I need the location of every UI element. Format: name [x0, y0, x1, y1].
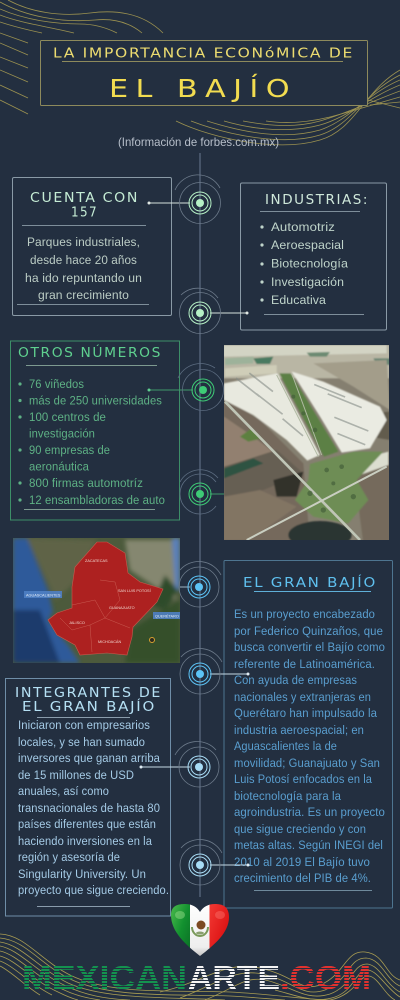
text: integrantes description: inversores que ganan arriba [18, 751, 160, 765]
text: parques industriales: Parques industriales, [27, 235, 140, 249]
image: map of El Bajio region: SAN LUIS POTOSÍ [118, 589, 152, 593]
panel: integrantes: EL GRAN BAJÍO [22, 699, 156, 715]
list: otros numeros: aeronáutica [29, 460, 89, 474]
footer brand text [22, 959, 371, 996]
image: map of El Bajio region: JALISCO [69, 621, 85, 625]
image: map of El Bajio region [13, 538, 180, 663]
timeline node 8 with connector [180, 839, 250, 885]
timeline line [199, 153, 201, 897]
list: otros numeros: más de 250 universidades [29, 394, 162, 408]
text: el gran bajio description [234, 607, 385, 885]
heading: cuenta con 157: CUENTA CON [30, 191, 139, 206]
list: industrias [260, 220, 348, 307]
list: industrias: Educativa [271, 293, 326, 307]
list: otros numeros: 90 empresas de [29, 443, 110, 457]
text: el gran bajio description: movilidad; Guanajuato y San [234, 756, 380, 770]
red region [48, 542, 163, 655]
list: industrias: Biotecnología [271, 256, 348, 270]
heading: el gran bajio: EL GRAN BAJÍO [243, 575, 377, 591]
panel: otros numeros [10, 341, 180, 520]
text: integrantes description: locales, y se han sumado [18, 735, 145, 749]
emblem [192, 920, 208, 936]
list: otros numeros [18, 377, 165, 507]
timeline node 2 with connector [180, 288, 248, 334]
icon: Mexican flag heart [171, 903, 230, 958]
text: el gran bajio description: Querétaro han impulsado la [234, 706, 377, 720]
list: industrias: Aeroespacial [271, 238, 344, 252]
text: el gran bajio description: Con ayuda de empresas [234, 673, 357, 687]
text: el gran bajio description: industria aeroespacial; en [234, 723, 364, 737]
footer brand text: MEXICAN [22, 959, 187, 996]
text: el gran bajio description: nacionales y extranjeras en [234, 690, 371, 704]
text: integrantes description: países diferentes que están [18, 817, 156, 831]
list: industrias: Automotriz [271, 220, 335, 234]
text: el gran bajio description: biotecnología para la [234, 789, 341, 803]
text: el gran bajio description: referente de Latinoamérica. [234, 657, 375, 671]
heading: integrantes: INTEGRANTES DE [15, 686, 162, 701]
text: integrantes description: región y asesoría de [18, 850, 120, 864]
text: parques industriales: desde hace 20 años [30, 253, 137, 267]
heading: otros numeros: OTROS NÚMEROS [18, 345, 162, 361]
list: otros numeros: 76 viñedos [29, 377, 84, 391]
heading: industrias: INDUSTRIAS: [265, 193, 369, 208]
text: integrantes description: anuales, así como [18, 784, 109, 798]
text: el gran bajio description: 2010 al 2019 El Bajío tuvo [234, 855, 370, 869]
timeline node 4 with connector [180, 470, 224, 514]
text: integrantes description [18, 718, 169, 897]
footer brand text: ARTE [188, 959, 280, 996]
panel: industrias [240, 183, 386, 330]
source note: (Información de forbes.com.mx) [118, 135, 279, 149]
text: el gran bajio description: crecimiento del PIB de 4%. [234, 871, 371, 885]
timeline node 1 with connector [148, 175, 220, 224]
text: parques industriales [25, 235, 142, 302]
text: el gran bajio description: por Federico Quinzaños, que [234, 624, 383, 638]
text: el gran bajio description: agroindustria. Es un proyecto [234, 805, 385, 819]
title line 2: EL BAJÍO [109, 74, 297, 103]
timeline node 7 with connector [140, 741, 219, 787]
text: integrantes description: transnacionales de hasta 80 [18, 801, 160, 815]
text: parques industriales: ha ido repuntando un [25, 271, 142, 285]
text: el gran bajio description: Es un proyecto encabezado [234, 607, 375, 621]
timeline node 6 with connector [180, 648, 250, 694]
text: integrantes description: proyecto que sigue creciendo. [18, 883, 169, 897]
timeline node 3 with connector [148, 363, 224, 410]
text: el gran bajio description: que sigue creciendo y con [234, 822, 366, 836]
text: integrantes description: haciendo inversiones en la [18, 834, 152, 848]
list: otros numeros: 100 centros de [29, 410, 106, 424]
text: el gran bajio description: Aguascalientes la de [234, 739, 337, 753]
panel: cuenta con 157 [12, 178, 172, 316]
image: map of El Bajio region: ZACATECAS [85, 559, 108, 563]
list: otros numeros: 800 firmas automotríz [29, 476, 143, 490]
title box [40, 40, 368, 106]
timeline node 5 [179, 561, 221, 607]
panel: cuenta con 157: 157 [71, 206, 98, 220]
panel: integrantes [6, 678, 170, 916]
text: integrantes description: Iniciaron con empresarios [18, 718, 150, 732]
image: map of El Bajio region: MICHOACÁN [98, 640, 121, 644]
text: parques industriales: gran crecimiento [38, 288, 129, 302]
image: map of El Bajio region: AGUASCALIENTES [26, 594, 61, 598]
text: integrantes description: de 15 millones de USD [18, 768, 134, 782]
footer brand text: .COM [280, 959, 371, 996]
list: otros numeros: 12 ensambladoras de auto [29, 493, 165, 507]
image: map of El Bajio region: QUERÉTARO [155, 614, 179, 618]
text: el gran bajio description: busca convertir el Bajío como [234, 640, 385, 654]
text: el gran bajio description: metas altas. Según INEGI del [234, 838, 383, 852]
panel: el gran bajio [224, 560, 392, 908]
list: industrias: Investigación [271, 275, 344, 289]
image: aerial view of industrial park [223, 345, 390, 549]
list: otros numeros: investigación [29, 426, 95, 440]
image: map of El Bajio region: GUANAJUATO [109, 606, 135, 610]
text: el gran bajio description: Luis Potosí enfocados en la [234, 772, 372, 786]
text: integrantes description: Singularity University. Un [18, 867, 146, 881]
title line 1: LA IMPORTANCIA ECONóMICA DE [53, 46, 354, 62]
